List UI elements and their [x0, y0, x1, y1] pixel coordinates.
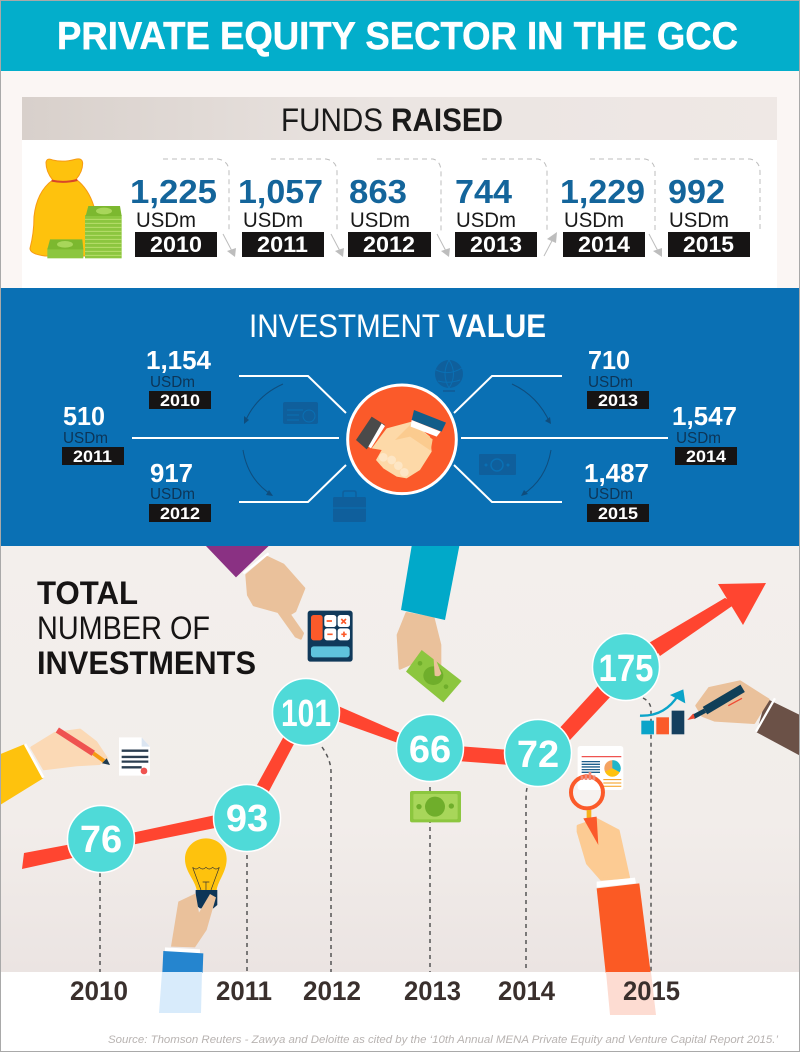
- icon: money bag: [30, 159, 122, 258]
- year axis labels: 2011: [216, 976, 272, 1006]
- year axis labels: 2010: [70, 976, 128, 1006]
- column: 2013: 2013: [470, 232, 522, 257]
- column: 2011: USDm: [243, 209, 303, 232]
- icon: credit card: [283, 402, 318, 424]
- value: 2012: USDm: [150, 486, 195, 503]
- value: 2013: USDm: [588, 374, 633, 391]
- icon: calculator: [308, 611, 353, 662]
- column: 2012: USDm: [350, 209, 410, 232]
- connector lines: [132, 376, 668, 502]
- heading: total number of investments: NUMBER OF: [37, 610, 210, 646]
- panel: total number of investments: [0, 546, 800, 973]
- heading: total number of investments: TOTAL: [37, 575, 138, 611]
- icon: hand holding banknote, teal sleeve: [398, 546, 462, 702]
- value: 2014: 2014: [686, 447, 727, 466]
- value: 2010: [146, 345, 212, 410]
- icon: globe: [435, 360, 463, 392]
- value: 2013: [587, 345, 649, 410]
- column: 2012: 2012: [363, 232, 415, 257]
- column: 2014: 2014: [578, 232, 631, 257]
- value: 2014: 1,547: [672, 401, 737, 431]
- node: 2014: [504, 720, 572, 786]
- year axis labels: 2012: [303, 976, 361, 1006]
- column: 2015: USDm: [669, 209, 729, 232]
- faded sleeve reflections: [159, 972, 656, 1015]
- icon: briefcase: [333, 491, 366, 522]
- icon: growth bars with arrow: [640, 689, 685, 734]
- year axis labels: 2013: [404, 976, 461, 1006]
- trend line arrow: [22, 583, 766, 869]
- curved arrows: [243, 384, 551, 496]
- year axis labels: 2014: [498, 976, 555, 1006]
- column: 2013: [455, 159, 557, 257]
- icon: document: [119, 737, 150, 776]
- value: 2012: 917: [150, 458, 193, 488]
- value: 2015: 1,487: [584, 458, 649, 488]
- column: 2010: 2010: [150, 232, 202, 257]
- icon: hand holding light bulb, blue sleeve: [162, 838, 227, 973]
- column: 2013: 744: [455, 173, 513, 210]
- column: 2014: USDm: [564, 209, 624, 232]
- value: 2015: [584, 458, 649, 523]
- icon: handshake: [348, 385, 456, 494]
- year axis labels: [70, 976, 680, 1006]
- column: 2010: USDm: [136, 209, 196, 232]
- value: 2011: USDm: [63, 430, 108, 447]
- node: 2013: [396, 714, 464, 782]
- value: 2010: USDm: [150, 374, 195, 391]
- value: 2013: 2013: [598, 391, 638, 410]
- heading: total number of investments: [37, 575, 256, 681]
- column: 2012: [348, 159, 450, 257]
- heading: total number of investments: INVESTMENTS: [37, 645, 256, 681]
- column: 2010: [130, 159, 236, 257]
- value: 2010: 1,154: [146, 345, 212, 375]
- dashed year guides: [100, 698, 651, 972]
- node: 2010: 76: [80, 819, 122, 861]
- column: 2013: USDm: [456, 209, 516, 232]
- value: 2010: 2010: [160, 391, 200, 410]
- value: 2015: 2015: [598, 504, 638, 523]
- column: 2011: 1,057: [238, 173, 323, 210]
- value: 2015: USDm: [588, 486, 633, 503]
- value: 2014: USDm: [676, 430, 721, 447]
- column: 2015: 992: [668, 173, 725, 210]
- icon: banknote: [479, 454, 516, 475]
- panel: investment value: [0, 288, 800, 546]
- value: 2012: [149, 458, 211, 523]
- node: 2011: [214, 784, 280, 852]
- node: 2012: 101: [281, 693, 331, 735]
- column: 2010: 1,225: [130, 173, 217, 210]
- value: 2014: [672, 401, 737, 466]
- value: 2011: 510: [63, 401, 105, 431]
- node: 2010: [68, 806, 134, 872]
- node: 2011: 93: [226, 798, 268, 840]
- column: 2012: 863: [349, 173, 407, 210]
- column: 2011: [238, 159, 344, 257]
- node: 2015: [592, 634, 660, 700]
- icon: hand writing with pen, yellow sleeve: [0, 730, 110, 805]
- column: 2014: 1,229: [560, 173, 645, 210]
- node: 2013: 66: [409, 729, 451, 771]
- year axis labels: 2015: [623, 976, 680, 1006]
- value: 2011: 2011: [73, 447, 112, 466]
- icon: hand writing with marker, brown sleeve: [687, 682, 800, 756]
- column: 2014: [560, 159, 662, 257]
- column: 2015: [668, 159, 760, 257]
- value: 2012: 2012: [160, 504, 200, 523]
- panel: funds raised: [0, 71, 800, 288]
- title: PRIVATE EQUITY SECTOR IN THE GCC: [57, 15, 738, 58]
- column: 2015: 2015: [683, 232, 734, 257]
- icon: banknote: [410, 791, 461, 822]
- heading: funds raised: FUNDS RAISED: [281, 102, 503, 138]
- node: 2012: [272, 678, 340, 746]
- node: 2014: 72: [517, 734, 559, 776]
- icon: pointing hand with purple sleeve: [206, 546, 304, 638]
- node: 2015: 175: [598, 648, 654, 690]
- icon: hand with magnifying glass, orange sleeve: [571, 772, 651, 973]
- heading: investment value: INVESTMENT VALUE: [249, 308, 546, 344]
- column: 2011: 2011: [257, 232, 308, 257]
- header banner: [0, 0, 800, 71]
- icon: report with pie chart: [578, 746, 623, 790]
- value: 2013: 710: [588, 345, 630, 375]
- source note: Source: Thomson Reuters - Zawya and Deloitte as cited by the ‘10th Annual MENA Private Equity and Venture Capital Report 2015.’: [108, 1034, 779, 1046]
- value: 2011: [62, 401, 124, 466]
